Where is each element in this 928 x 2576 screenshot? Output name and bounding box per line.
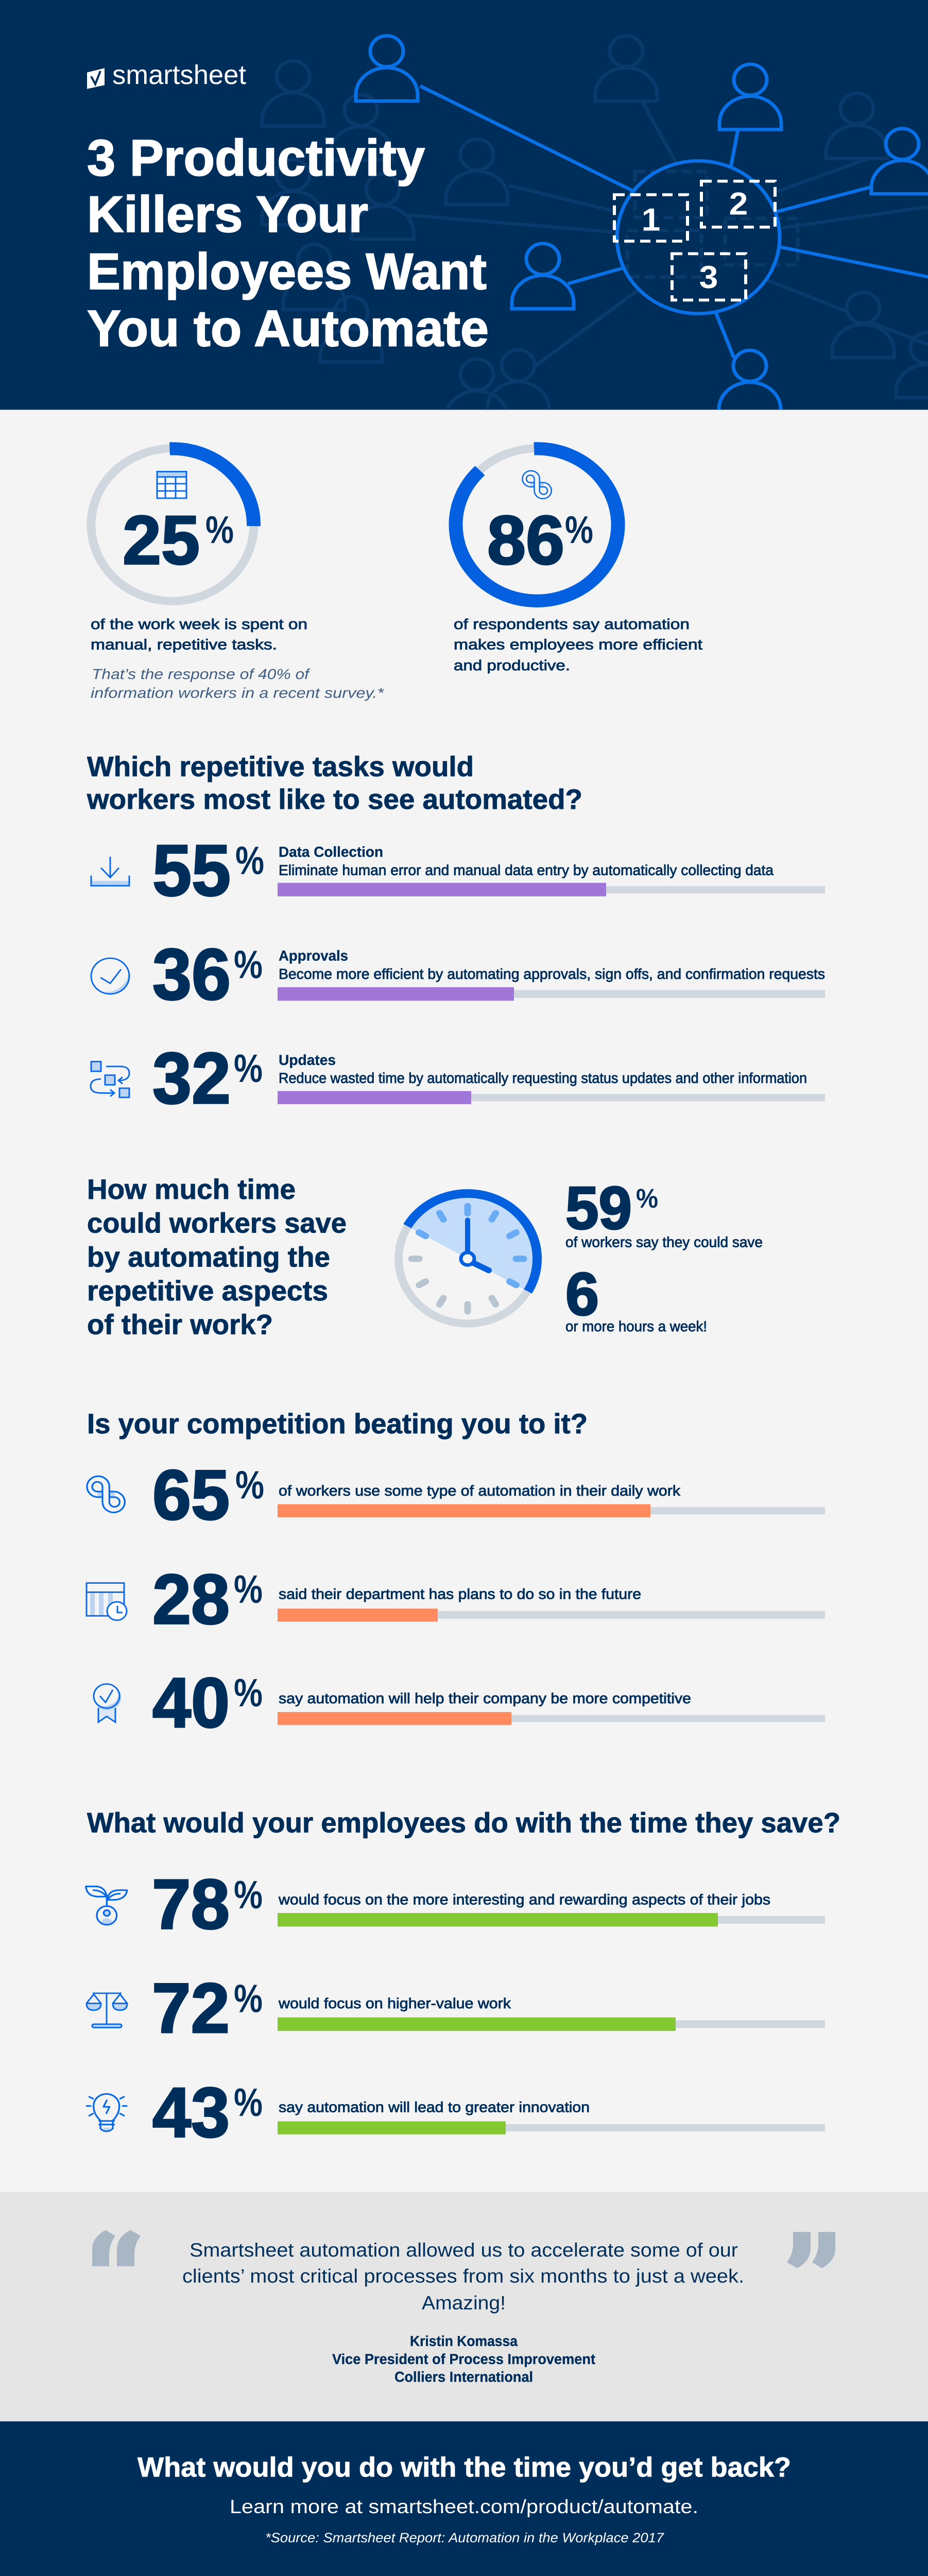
text: approvals: Approvals [279, 948, 348, 964]
footer heading: What would you do with the time you’d get back? [138, 2452, 791, 2483]
text: 86% description [454, 617, 703, 673]
stat: 59% of workers: of workers say they could save [565, 1234, 763, 1250]
stat: 43%: 43 [152, 2073, 230, 2152]
title: Killers Your [87, 186, 368, 243]
stat: 32%: % [234, 1047, 263, 1091]
ring chart: 86% [455, 448, 618, 601]
box numbers: 3 [699, 259, 718, 295]
panel: 78 percent row [86, 1865, 825, 1943]
text: approvals: Become more efficient by automating approvals, sign offs, and confirmation requests [279, 967, 825, 982]
stat: 78%: 78 [152, 1865, 230, 1943]
stat: 6 or more hours [565, 1261, 707, 1335]
panel: 72 percent row [87, 1969, 825, 2047]
text: updates: Updates [279, 1053, 336, 1069]
stat: 28%: % [234, 1568, 263, 1612]
stat: 78%: % [234, 1873, 263, 1917]
heading: time saved [87, 1174, 347, 1341]
text: daily automation: of workers use some type of automation in their daily work [279, 1483, 681, 1499]
text: competitive: say automation will help their company be more competitive [279, 1691, 691, 1707]
panel: footer [0, 2421, 928, 2576]
icon: scales [87, 1993, 127, 2027]
text: innovation: say automation will lead to greater innovation [279, 2099, 590, 2115]
stat: 59% of workers: 59 [565, 1175, 632, 1242]
text: survey note [91, 666, 384, 701]
icon: table [157, 471, 186, 498]
text: data collection: Eliminate human error and manual data entry by automatically collecting data [279, 862, 774, 878]
icon: opening quote [92, 2230, 141, 2266]
stat: 55%: 55 [152, 829, 231, 911]
title: Employees Want [87, 243, 487, 300]
stat: 40%: 40 [152, 1663, 230, 1742]
text: attribution [332, 2333, 595, 2385]
stat: 86%: % [565, 509, 593, 551]
stat: 55%: % [235, 839, 264, 883]
panel: header [0, 0, 928, 424]
panel: approvals row [91, 934, 825, 1015]
heading: time saved: by automating the [87, 1241, 330, 1273]
panel: 40 percent row [94, 1663, 825, 1742]
icon: workflow [91, 1062, 129, 1097]
stat: 36%: % [234, 943, 263, 987]
text: updates: Reduce wasted time by automatically requesting status updates and other information [279, 1070, 807, 1086]
heading: competition: Is your competition beating you to it? [87, 1408, 588, 1439]
title [87, 129, 489, 357]
bar: 32% [278, 1091, 825, 1104]
icon: link [87, 1476, 125, 1513]
stat: 28%: 28 [152, 1560, 230, 1638]
heading: time saved: How much time [87, 1174, 296, 1205]
icon: closing quote [787, 2232, 835, 2268]
bar: 78% [278, 1913, 825, 1926]
network illustration [262, 36, 928, 424]
stat: 72%: 72 [152, 1969, 230, 2047]
text: quote: Amazing! [422, 2292, 506, 2314]
bar: 72% [278, 2018, 825, 2031]
panel: updates row [91, 1038, 825, 1118]
text: 86% description: of respondents say automation [454, 617, 690, 633]
text: attribution: Vice President of Process Improvement [332, 2351, 595, 2367]
stat: 6 or more hours: 6 [565, 1261, 599, 1328]
text: attribution: Kristin Komassa [410, 2333, 518, 2349]
stat: 86%: 86 [487, 502, 564, 579]
stat: 40%: % [234, 1671, 263, 1715]
text: quote: Smartsheet automation allowed us to accelerate some of our [190, 2240, 738, 2261]
icon: plant person [86, 1887, 127, 1925]
title: 3 Productivity [87, 129, 425, 187]
heading: time saved: could workers save [87, 1208, 347, 1239]
heading: time saved: repetitive aspects [87, 1275, 328, 1307]
heading: repetitive tasks: workers most like to see automated? [87, 784, 582, 815]
text: 86% description: and productive. [454, 657, 570, 673]
icon: download [91, 857, 129, 886]
bar: 65% [278, 1504, 825, 1517]
logo: smartsheet: smartsheet [112, 59, 246, 90]
footer source: *Source: Smartsheet Report: Automation in the Workplace 2017 [265, 2530, 664, 2545]
text: 25% description: of the work week is spent on [91, 617, 307, 633]
panel: data collection row [91, 829, 825, 911]
stat: 65%: % [235, 1463, 264, 1507]
panel: 86 percent stat [454, 448, 703, 673]
text: rewarding: would focus on the more interesting and rewarding aspects of their jobs [278, 1892, 770, 1908]
box numbers: 1 [642, 201, 660, 238]
bar: 28% [278, 1608, 825, 1622]
panel: testimonial [0, 2192, 928, 2421]
panel: 43 percent row [87, 2073, 825, 2152]
text: survey note: information workers in a recent survey.* [91, 685, 384, 701]
text: data collection [279, 844, 774, 878]
text: updates [279, 1053, 807, 1086]
stat: 25%: 25 [123, 502, 200, 579]
text: data collection: Data Collection [279, 844, 383, 860]
text: quote [182, 2240, 744, 2314]
text: 25% description [91, 617, 307, 653]
stat: 59% of workers: % [636, 1183, 658, 1213]
panel: 28 percent row [87, 1560, 825, 1638]
stat: 65%: 65 [152, 1455, 230, 1534]
text: higher-value: would focus on higher-value work [278, 1996, 511, 2012]
icon: light bulb [87, 2094, 127, 2131]
heading: employees' time: What would your employees do with the time they save? [87, 1807, 840, 1839]
text: survey note: That’s the response of 40% of [92, 666, 311, 682]
icon: ribbon [94, 1684, 121, 1722]
ring chart: 25% [91, 448, 254, 601]
stat: 25%: % [205, 509, 234, 551]
clock chart [399, 1194, 537, 1324]
text: approvals [279, 948, 825, 982]
bar: 55% [278, 883, 825, 896]
text: quote: clients’ most critical processes from six months to just a week. [182, 2266, 744, 2287]
box numbers: 2 [729, 185, 748, 222]
bar: 43% [278, 2121, 825, 2134]
text: department plans: said their department has plans to do so in the future [279, 1586, 641, 1602]
text: attribution: Colliers International [394, 2369, 533, 2385]
stat: 36%: 36 [152, 934, 231, 1015]
icon: link [522, 471, 552, 499]
heading: time saved: of their work? [87, 1309, 273, 1341]
heading: repetitive tasks: Which repetitive tasks would [87, 751, 474, 782]
bar: 36% [278, 987, 825, 1001]
icon: calendar clock [87, 1583, 127, 1620]
title: You to Automate [87, 300, 489, 357]
stat: 43%: % [234, 2081, 263, 2125]
box numbers [642, 185, 748, 295]
stat: 6 or more hours: or more hours a week! [565, 1319, 707, 1335]
stat: 59% of workers [565, 1175, 763, 1250]
text: 86% description: makes employees more efficient [454, 637, 703, 653]
stat: 72%: % [234, 1977, 263, 2021]
heading: repetitive tasks [87, 751, 582, 815]
icon: check circle [91, 958, 129, 994]
panel: 25 percent stat [91, 448, 384, 701]
stat: 32%: 32 [152, 1038, 231, 1118]
bar: 40% [278, 1712, 825, 1725]
panel: 65 percent row [87, 1455, 825, 1534]
footer link text: Learn more at smartsheet.com/product/automate. [230, 2496, 698, 2518]
text: 25% description: manual, repetitive tasks. [91, 637, 277, 653]
